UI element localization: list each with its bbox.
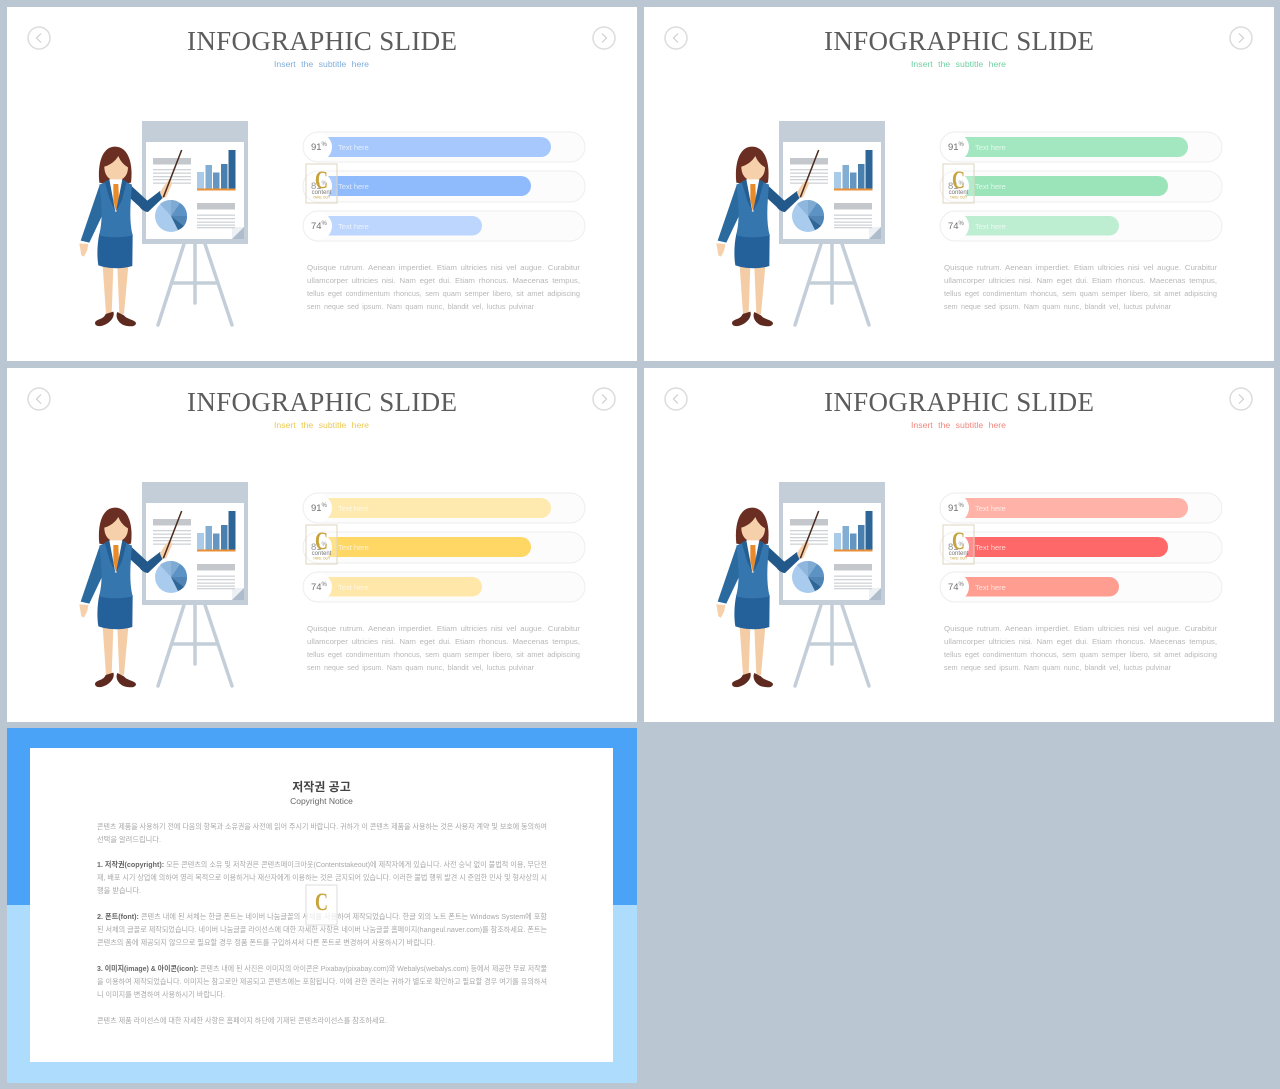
bar: 74% bbox=[940, 211, 1222, 241]
bar: 91%: Text here bbox=[975, 504, 1006, 513]
section 1: copyright: 행을 받습니다. bbox=[97, 885, 141, 895]
panel: copyright notice bbox=[7, 728, 637, 1083]
section 3: image and icon: 을 이용하여 제작되었습니다. 이미지는 참고로만 제공되고 콘텐츠에는 포함됩니다. 이에 관한 권리는 귀하가 별도로 확인하고 필요할 경우 여기를 유의하셔 bbox=[97, 976, 547, 986]
section 3: image and icon: 니 이미지를 변경하여 사용하시기 바랍니다. bbox=[97, 989, 225, 999]
text block: tellus eget condimentum rhoncus, sem quam semper libero, sit amet adipiscing bbox=[944, 650, 1217, 659]
icon: previous arrow bbox=[665, 388, 687, 410]
bar: 91% bbox=[940, 132, 1222, 162]
subtitle: Insert the subtitle here bbox=[911, 59, 1006, 69]
section 2: font: 콘텐츠의 폼에 제공되지 않으므로 필요할 경우 정품 폰트를 구입하셔서 다른 폰트로 변경하여 사용하시기 바랍니다. bbox=[97, 937, 435, 947]
notice subheading: Copyright Notice bbox=[290, 796, 353, 806]
text block bbox=[944, 624, 1218, 672]
bar: 91%: 91 bbox=[311, 142, 322, 153]
bar: 74% bbox=[940, 572, 1222, 602]
section 1: copyright: 1. 저작권(copyright): 모든 콘텐츠의 소유 및 저작권은 콘텐츠메이크아웃(Contentstakeout)에 제작자에게 있습니다. 사전 승낙 없이 불법적 이용, 무단전 bbox=[97, 859, 547, 869]
bar: 81%: 81 bbox=[948, 181, 959, 192]
title: INFOGRAPHIC SLIDE bbox=[187, 387, 457, 417]
bar: 81%: 81 bbox=[311, 542, 322, 553]
notice heading: 저작권 공고 bbox=[292, 779, 351, 794]
bar: 91%: % bbox=[958, 503, 964, 509]
bar: 74% bbox=[303, 572, 585, 602]
text block: ullamcorper ultricies nisi. Nam eget dui. Etiam rhoncus. Maecenas tempus, bbox=[944, 637, 1217, 646]
text block: ullamcorper ultricies nisi. Nam eget dui. Etiam rhoncus. Maecenas tempus, bbox=[307, 276, 580, 285]
intro paragraph bbox=[97, 821, 547, 844]
bar: 91%: Text here bbox=[338, 504, 369, 513]
bar: 74%: % bbox=[322, 221, 328, 227]
watermark: TAKE OUT bbox=[313, 196, 331, 200]
watermark bbox=[306, 525, 337, 564]
bar: 74%: Text here bbox=[338, 222, 369, 231]
watermark: content bbox=[312, 190, 332, 196]
text block: Quisque rutrum. Aenean imperdiet. Etiam ultricies nisi vel augue. Curabitur bbox=[307, 624, 581, 633]
bar: 91%: 91 bbox=[311, 503, 322, 514]
text block: Quisque rutrum. Aenean imperdiet. Etiam ultricies nisi vel augue. Curabitur bbox=[944, 624, 1218, 633]
illustration: presenter with board bbox=[716, 482, 885, 687]
notice background upper band bbox=[7, 728, 637, 905]
text block: ullamcorper ultricies nisi. Nam eget dui. Etiam rhoncus. Maecenas tempus, bbox=[944, 276, 1217, 285]
text block: Quisque rutrum. Aenean imperdiet. Etiam ultricies nisi vel augue. Curabitur bbox=[307, 263, 581, 272]
bar: 91%: % bbox=[322, 503, 328, 509]
text block: Quisque rutrum. Aenean imperdiet. Etiam ultricies nisi vel augue. Curabitur bbox=[944, 263, 1218, 272]
icon: next arrow bbox=[593, 388, 615, 410]
title: INFOGRAPHIC SLIDE bbox=[824, 26, 1094, 56]
illustration: presenter with board bbox=[79, 121, 248, 326]
bar: 91%: % bbox=[958, 142, 964, 148]
watermark: C bbox=[315, 528, 328, 555]
bar: 81%: Text here bbox=[338, 182, 369, 191]
slide background bbox=[7, 368, 637, 722]
bar: 81%: Text here bbox=[975, 182, 1006, 191]
watermark: C bbox=[952, 167, 965, 194]
bar: 74%: 74 bbox=[311, 582, 322, 593]
text block bbox=[307, 263, 581, 311]
slide background bbox=[644, 7, 1274, 361]
watermark: C bbox=[315, 889, 328, 916]
section 1: copyright bbox=[97, 859, 547, 895]
bar: 81%: % bbox=[958, 181, 964, 187]
bar: 74%: % bbox=[958, 221, 964, 227]
bar: 81% bbox=[940, 532, 1222, 563]
illustration: presenter with board bbox=[716, 121, 885, 326]
text block: sem neque sed ipsum. Nam quam nunc, blandit vel, luctus pulvinar bbox=[307, 302, 534, 311]
bar: 81%: 81 bbox=[311, 181, 322, 192]
icon: next arrow bbox=[1230, 27, 1252, 49]
section 3: image and icon: 3. 이미지(image) & 아이콘(icon): 콘텐츠 내에 된 사진은 이미지의 아이콘은 Pixabay(pixabay.com)와 Webalys(webalys.com) 등에서 제공한 무료 저작물 bbox=[97, 963, 547, 973]
bar: 81%: % bbox=[322, 542, 328, 548]
bar: 74%: % bbox=[322, 582, 328, 588]
section 1: copyright: 재, 배포 시기 상업에 의하여 영리 목적으로 이용하거나 재산자에게 이용하는 것은 금지되어 있습니다. 이러한 불법 행위 발견 시 준엄한 민사 및 형사상의 시 bbox=[97, 872, 547, 882]
bar: 74%: 74 bbox=[948, 582, 959, 593]
section 3: image and icon bbox=[97, 963, 547, 999]
section 2: font: 된 서체의 글꼴로 제작되었습니다. 네이버 나눔글꼴 라이선스에 대한 자세한 사항은 네이버 나눔글꼴 홈페이지(hangeul.naver.com)를 참조하세요. 폰트는 bbox=[97, 924, 547, 934]
panel: blue slide bbox=[7, 7, 637, 361]
text block bbox=[307, 624, 581, 672]
bar: 91%: 91 bbox=[948, 142, 959, 153]
bar: 91% bbox=[303, 493, 585, 523]
bar: 81% bbox=[940, 171, 1222, 202]
text block: tellus eget condimentum rhoncus, sem quam semper libero, sit amet adipiscing bbox=[307, 289, 580, 298]
bar: 74%: % bbox=[958, 582, 964, 588]
panel: green slide bbox=[644, 7, 1274, 361]
watermark: C bbox=[952, 528, 965, 555]
icon: next arrow bbox=[1230, 388, 1252, 410]
bar: 81%: Text here bbox=[975, 543, 1006, 552]
watermark: TAKE OUT bbox=[313, 556, 331, 560]
watermark: C bbox=[315, 167, 328, 194]
intro paragraph: 선택을 알려드립니다. bbox=[97, 834, 161, 844]
watermark bbox=[943, 525, 974, 564]
icon: previous arrow bbox=[665, 27, 687, 49]
slide background bbox=[644, 368, 1274, 722]
subtitle: Insert the subtitle here bbox=[274, 420, 369, 430]
subtitle: Insert the subtitle here bbox=[274, 59, 369, 69]
intro paragraph: 콘텐츠 제품을 사용하기 전에 다음의 항목과 소유권을 사전에 읽어 주시기 바랍니다. 귀하가 이 콘텐츠 제품을 사용하는 것은 사용자 계약 및 보호에 동의하여 bbox=[97, 821, 547, 831]
text block: tellus eget condimentum rhoncus, sem quam semper libero, sit amet adipiscing bbox=[944, 289, 1217, 298]
notice background lower band bbox=[7, 905, 637, 1083]
bar: 74%: Text here bbox=[975, 583, 1006, 592]
bar: 91%: % bbox=[322, 142, 328, 148]
section 2: font bbox=[97, 911, 547, 947]
watermark: TAKE OUT bbox=[950, 556, 968, 560]
title: INFOGRAPHIC SLIDE bbox=[824, 387, 1094, 417]
text block: sem neque sed ipsum. Nam quam nunc, blandit vel, luctus pulvinar bbox=[307, 663, 534, 672]
text block: ullamcorper ultricies nisi. Nam eget dui. Etiam rhoncus. Maecenas tempus, bbox=[307, 637, 580, 646]
bar: 81% bbox=[303, 532, 585, 563]
subtitle: Insert the subtitle here bbox=[911, 420, 1006, 430]
watermark: TAKE OUT bbox=[950, 196, 968, 200]
bar: 91%: 91 bbox=[948, 503, 959, 514]
slide background bbox=[7, 7, 637, 361]
bar: 81%: Text here bbox=[338, 543, 369, 552]
bar: 74%: Text here bbox=[338, 583, 369, 592]
illustration: presenter with board bbox=[79, 482, 248, 687]
text block: sem neque sed ipsum. Nam quam nunc, blandit vel, luctus pulvinar bbox=[944, 302, 1171, 311]
bar: 81%: % bbox=[958, 542, 964, 548]
icon: previous arrow bbox=[28, 27, 50, 49]
title: INFOGRAPHIC SLIDE bbox=[187, 26, 457, 56]
watermark: content bbox=[949, 190, 969, 196]
watermark: content bbox=[949, 551, 969, 557]
notice card bbox=[30, 748, 613, 1062]
bar: 74%: 74 bbox=[948, 221, 959, 232]
section 2: font: 2. 폰트(font): 콘텐츠 내에 된 서체는 한글 폰트는 네이버 나눔글꼴의 서체를 사용하여 제작되었습니다. 한글 외의 노트 폰트는 Windows System에 포함 bbox=[97, 911, 547, 921]
bar: 74%: Text here bbox=[975, 222, 1006, 231]
bar: 81% bbox=[303, 171, 585, 202]
panel: yellow slide bbox=[7, 368, 637, 722]
watermark bbox=[306, 885, 337, 925]
bar: 81%: % bbox=[322, 181, 328, 187]
closing line: 콘텐츠 제품 라이선스에 대한 자세한 사항은 홈페이지 하단에 기재된 콘텐츠라이선스를 참조하세요. bbox=[97, 1015, 387, 1025]
bar: 91% bbox=[303, 132, 585, 162]
watermark: content bbox=[312, 551, 332, 557]
bar: 91%: Text here bbox=[338, 143, 369, 152]
icon: previous arrow bbox=[28, 388, 50, 410]
text block: sem neque sed ipsum. Nam quam nunc, blandit vel, luctus pulvinar bbox=[944, 663, 1171, 672]
bar: 74%: 74 bbox=[311, 221, 322, 232]
bar: 91%: Text here bbox=[975, 143, 1006, 152]
icon: next arrow bbox=[593, 27, 615, 49]
watermark bbox=[943, 164, 974, 203]
text block: tellus eget condimentum rhoncus, sem quam semper libero, sit amet adipiscing bbox=[307, 650, 580, 659]
text block bbox=[944, 263, 1218, 311]
bar: 91% bbox=[940, 493, 1222, 523]
watermark bbox=[306, 164, 337, 203]
bar: 81%: 81 bbox=[948, 542, 959, 553]
bar: 74% bbox=[303, 211, 585, 241]
panel: red slide bbox=[644, 368, 1274, 722]
